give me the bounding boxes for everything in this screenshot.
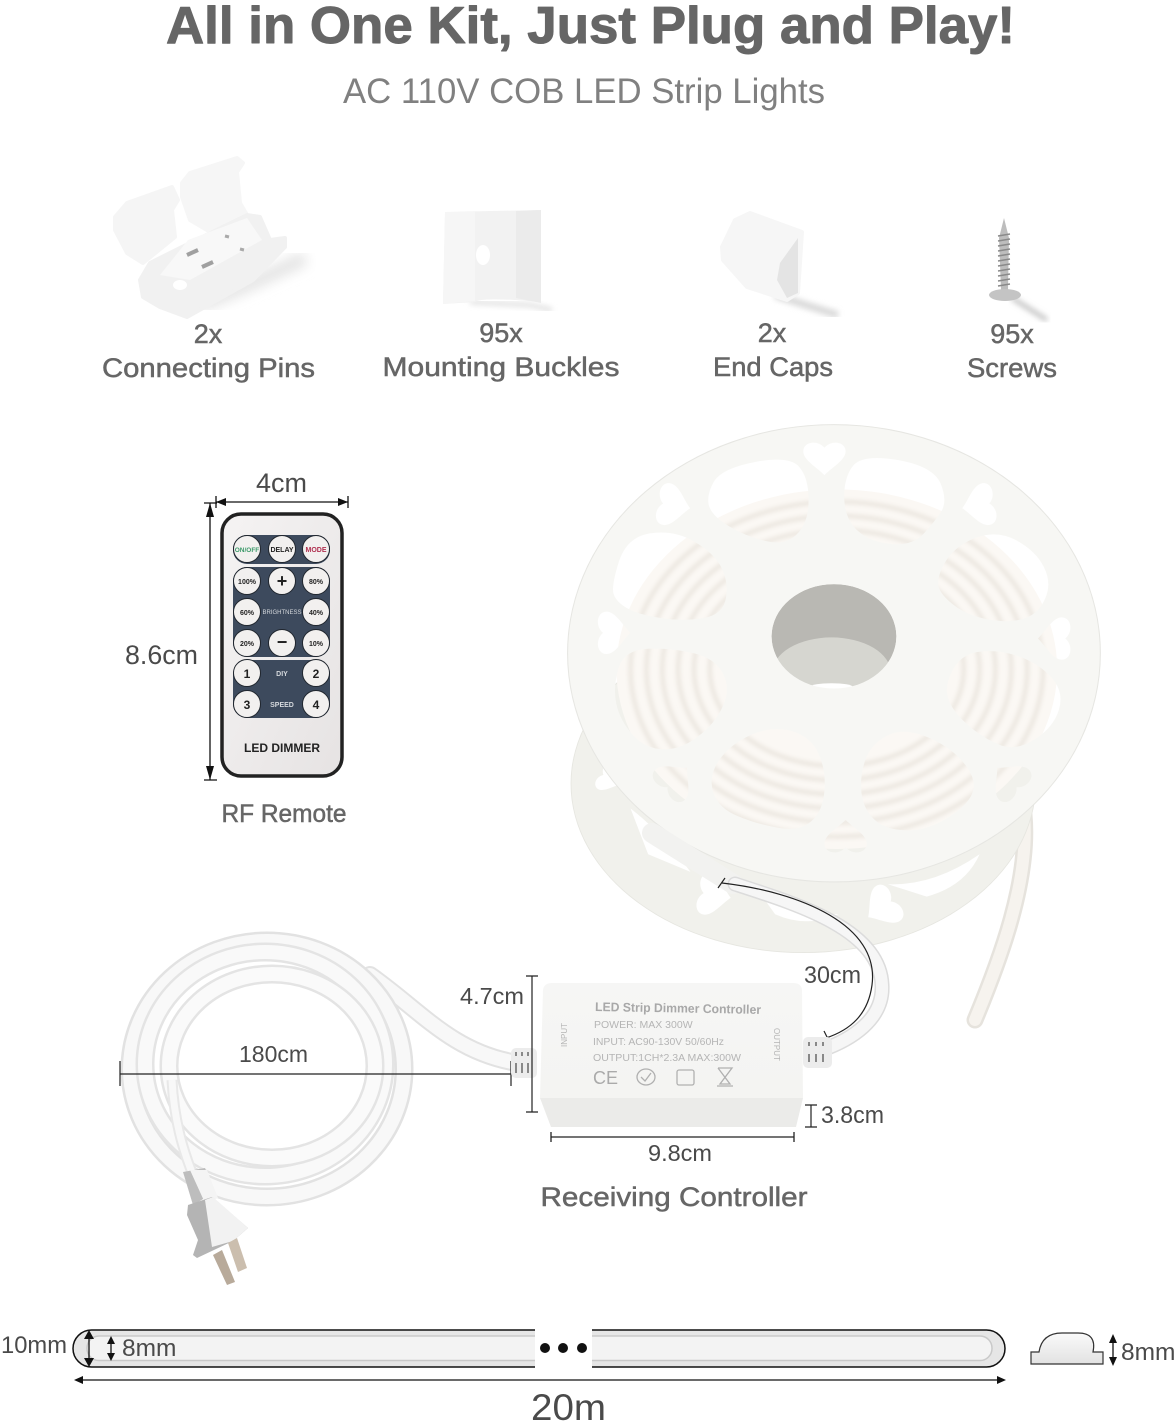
label: connecting pins count: 2x <box>194 319 223 349</box>
remote button labels: 100% <box>238 579 257 586</box>
remote width dimension <box>216 496 348 508</box>
panel: receiving controller <box>460 976 884 1212</box>
icon: connecting pin clip <box>115 158 305 317</box>
panel: end caps <box>713 213 838 382</box>
depth dimension <box>805 1105 817 1127</box>
controller printed text: OUTPUT:1CH*2.3A MAX:300W <box>593 1052 741 1064</box>
label: 180cm: 180cm <box>239 1041 308 1067</box>
icon: mounting buckle <box>443 210 552 310</box>
panel: connecting pins <box>102 158 315 383</box>
label: mounting buckles name: Mounting Buckles <box>382 352 620 382</box>
label: 4cm: 4cm <box>256 468 307 498</box>
controller printed text: INPUT: AC90-130V 50/60Hz <box>593 1036 724 1048</box>
label: RF remote: RF Remote <box>222 800 346 828</box>
ellipsis dots <box>540 1343 587 1353</box>
label: receiving controller: Receiving Controller <box>540 1182 808 1212</box>
right connector <box>803 1037 832 1068</box>
remote button labels: 4 <box>313 698 320 712</box>
remote button labels: − <box>277 632 287 652</box>
label: end caps name: End Caps <box>713 352 833 382</box>
icon: screw <box>989 218 1047 320</box>
label: 8.6cm: 8.6cm <box>125 640 198 670</box>
controller printed text: INPUT <box>560 1023 569 1047</box>
back disc <box>570 682 1034 953</box>
remote button labels: 10% <box>309 641 324 648</box>
remote button labels: 2 <box>313 667 320 681</box>
remote body <box>222 514 342 776</box>
panel: mounting buckles <box>382 210 620 382</box>
controller output cable <box>735 884 882 1050</box>
panel: LED strip reel <box>567 424 1101 1050</box>
label: screws count: 95x <box>990 319 1034 349</box>
remote button labels: + <box>277 571 287 591</box>
subtitle: AC 110V COB LED Strip Lights <box>343 72 825 111</box>
controller box <box>540 983 803 1127</box>
remote button labels: 80% <box>309 579 324 586</box>
remote button labels: ON/OFF <box>235 547 259 554</box>
controller certification icons <box>637 1068 733 1086</box>
left connector <box>511 1048 537 1078</box>
10mm arrow <box>84 1330 94 1367</box>
strip cross-section <box>1031 1333 1103 1364</box>
controller printed text <box>560 1000 781 1088</box>
remote button labels: DIY <box>276 671 288 678</box>
label: 8mm: 8mm <box>122 1335 176 1362</box>
remote button labels: 1 <box>244 667 251 681</box>
controller printed text: LED Strip Dimmer Controller <box>595 1000 761 1017</box>
label: 3.8cm: 3.8cm <box>821 1102 884 1129</box>
remote button labels: BRIGHTNESS <box>262 610 302 616</box>
coil <box>616 489 1057 849</box>
panel: power cord <box>120 941 512 1285</box>
cord coil <box>130 941 512 1197</box>
controller printed text: CE <box>593 1068 618 1088</box>
remote button labels: DELAY <box>270 547 294 554</box>
remote height dimension <box>204 503 217 780</box>
panel: strip dimensions <box>1 1326 1175 1423</box>
front disc <box>567 424 1101 882</box>
remote button labels: MODE <box>306 547 327 554</box>
remote button labels: 60% <box>240 610 255 617</box>
label: 4.7cm: 4.7cm <box>460 983 524 1009</box>
remote button labels: 40% <box>309 610 324 617</box>
strip diagram <box>73 1326 1005 1371</box>
8mm arrow <box>107 1336 115 1361</box>
strip tail <box>975 815 1025 1020</box>
controller printed text: OUTPUT <box>772 1028 781 1061</box>
label: screws name: Screws <box>967 353 1057 383</box>
label: 30cm: 30cm <box>804 962 861 989</box>
panel: screws <box>967 218 1057 383</box>
reel graphic <box>567 424 1101 953</box>
180cm dimension <box>120 1061 511 1086</box>
icon: end cap <box>722 213 838 315</box>
length arrow <box>74 1376 1006 1384</box>
remote button labels: 20% <box>240 641 255 648</box>
remote button labels: 3 <box>244 698 251 712</box>
label: end caps count: 2x <box>758 318 787 348</box>
hub interior <box>772 584 896 708</box>
remote button labels <box>235 547 327 712</box>
cross-section arrow <box>1109 1334 1117 1366</box>
width dimension <box>551 1132 794 1142</box>
plug <box>183 1168 248 1285</box>
remote brand text: LED DIMMER <box>244 741 320 755</box>
label: mounting buckles count: 95x <box>479 318 523 348</box>
remote button labels: SPEED <box>270 702 294 709</box>
label: cross-section 8mm: 8mm <box>1121 1339 1175 1366</box>
30cm arc dimension <box>718 878 873 1043</box>
label: connecting pins name: Connecting Pins <box>102 353 315 383</box>
controller printed text: POWER: MAX 300W <box>594 1019 693 1031</box>
connector on reel <box>652 833 733 884</box>
panel: RF remote <box>125 468 348 828</box>
label: 9.8cm: 9.8cm <box>648 1140 712 1166</box>
label: 10mm: 10mm <box>1 1332 67 1359</box>
remote button panels <box>233 535 330 718</box>
height dimension <box>526 976 538 1112</box>
remote buttons <box>234 536 330 718</box>
